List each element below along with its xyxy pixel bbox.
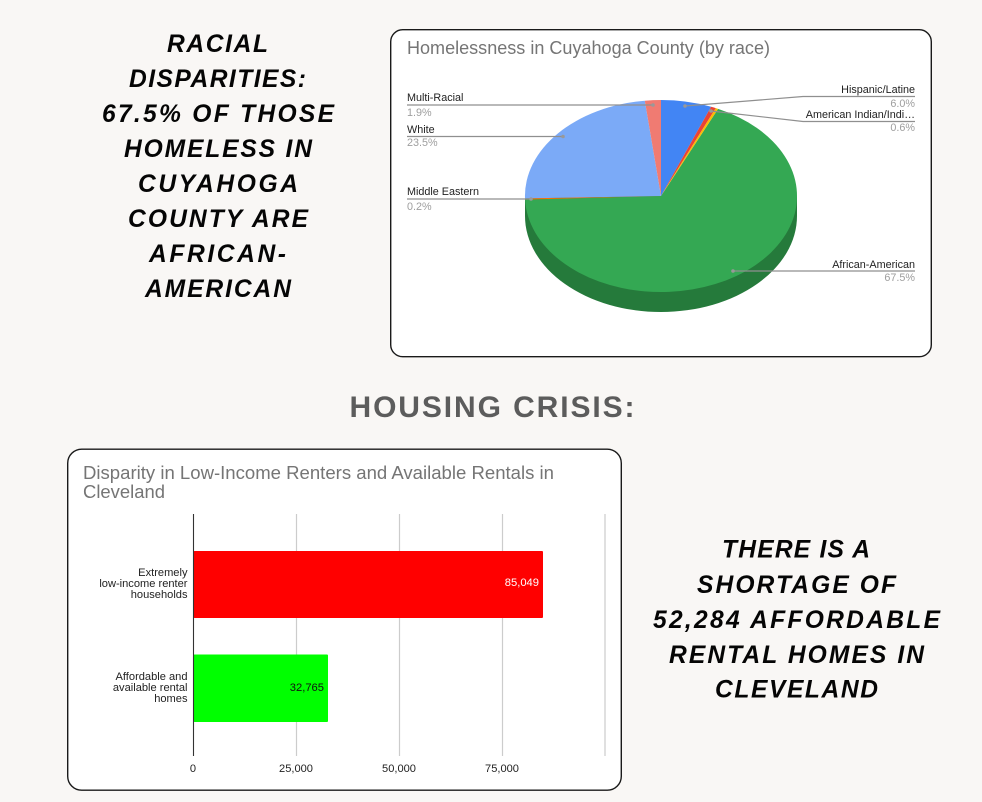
panel: pie chart homelessness by race: [391, 30, 931, 357]
label: Hispanic/Latine: [683, 84, 915, 110]
text block: shortage of affordable homes: 52,284 AFFORDABLE: [653, 607, 942, 634]
label: Multi-Racial: [407, 92, 655, 119]
pie slice: Middle Eastern: [525, 196, 661, 200]
category label: affordable: homes: [154, 693, 188, 705]
pie slice: Hispanic/Latine: [661, 100, 711, 196]
x axis tick labels: [190, 763, 519, 775]
text block: shortage of affordable homes: [653, 536, 942, 704]
text block: racial disparities: [102, 31, 336, 303]
heading: housing crisis: HOUSING CRISIS:: [350, 391, 634, 424]
text block: racial disparities: COUNTY ARE: [128, 206, 310, 233]
text block: shortage of affordable homes: THERE IS A: [722, 536, 870, 564]
pie slice: African-American: [525, 109, 797, 292]
x axis tick labels: 25,000: [279, 763, 313, 775]
pie slice: Multi-Racial: [645, 100, 661, 196]
label: African-American: 67.5%: [884, 272, 915, 284]
bar: affordable and available rental homes: [194, 654, 328, 722]
text block: racial disparities: RACIAL: [167, 31, 268, 58]
pie: 3D side: [525, 196, 797, 312]
label: African-American: African-American: [832, 259, 915, 271]
label: African-American: [731, 259, 915, 284]
text block: racial disparities: AMERICAN: [144, 276, 292, 303]
x axis tick labels: 0: [190, 763, 196, 775]
bar: extremely low-income renter households: 85,049: [505, 577, 539, 589]
pie slice: White: [525, 101, 661, 198]
text block: racial disparities: CUYAHOGA: [138, 171, 298, 198]
label: Hispanic/Latine: Hispanic/Latine: [841, 84, 915, 96]
category label: extremely low-income: Extremely: [138, 567, 188, 579]
text block: racial disparities: 67.5% OF THOSE: [102, 101, 336, 128]
label: Middle Eastern: [407, 186, 533, 213]
pie slice: American Indian: [661, 107, 716, 196]
label: Middle Eastern: 0.2%: [407, 201, 432, 213]
label: White: [407, 124, 565, 149]
x axis tick labels: 75,000: [485, 763, 519, 775]
category label: affordable: [113, 671, 188, 705]
label: American Indian: American Indian/Indi…: [806, 109, 915, 121]
label: American Indian: [709, 109, 915, 134]
bar chart title: Cleveland: [83, 482, 165, 502]
text block: racial disparities: AFRICAN-: [148, 241, 286, 268]
category label: affordable: Affordable and: [116, 671, 188, 683]
panel: bar chart renters and rentals: [68, 449, 621, 790]
bar chart title: [83, 463, 554, 502]
pie slice: yellow sliver: [661, 108, 718, 196]
label: Middle Eastern: Middle Eastern: [407, 186, 479, 198]
category label: extremely low-income: [99, 567, 188, 601]
category label: affordable: available rental: [113, 682, 188, 694]
bar: extremely low-income renter households: [194, 551, 543, 618]
label: Multi-Racial: Multi-Racial: [407, 92, 463, 104]
label: American Indian: 0.6%: [890, 122, 915, 134]
bar: affordable and available rental homes: 32,765: [290, 682, 324, 694]
bar chart title: Disparity in Low-Income Renters and Available Rentals in: [83, 463, 554, 483]
label: White: White: [407, 124, 435, 136]
x axis tick labels: 50,000: [382, 763, 416, 775]
text block: shortage of affordable homes: CLEVELAND: [715, 676, 878, 704]
pie chart title: Homelessness in Cuyahoga County (by race): [407, 38, 770, 58]
text block: racial disparities: DISPARITIES:: [129, 66, 306, 93]
label: White: 23.5%: [407, 137, 438, 149]
text block: shortage of affordable homes: SHORTAGE OF: [697, 572, 897, 599]
label: Hispanic/Latine: 6.0%: [890, 98, 915, 110]
label: Multi-Racial: 1.9%: [407, 107, 432, 119]
category label: extremely low-income: households: [131, 589, 188, 601]
text block: shortage of affordable homes: RENTAL HOMES IN: [669, 642, 925, 669]
text block: racial disparities: HOMELESS IN: [124, 136, 313, 163]
category label: extremely low-income: low-income renter: [99, 578, 188, 590]
